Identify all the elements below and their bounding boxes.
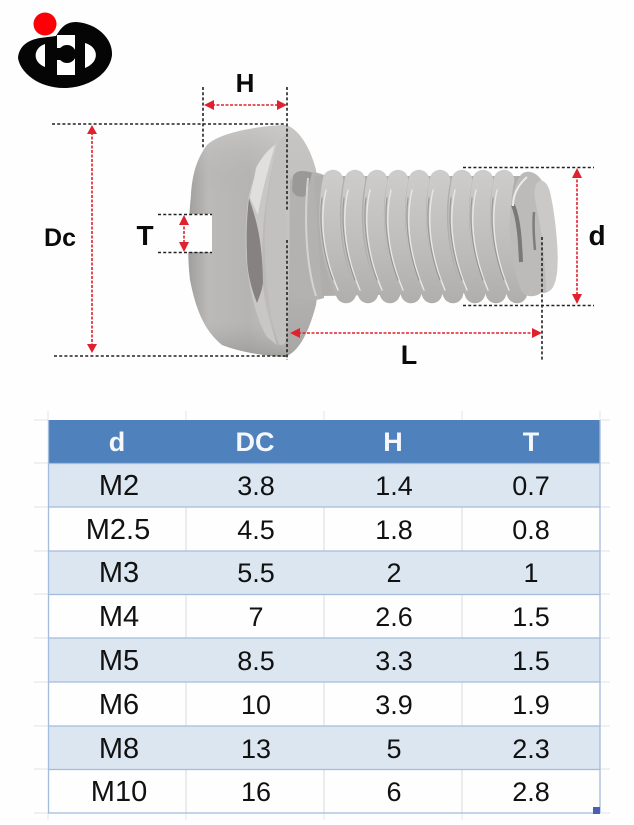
row M2.5: 1.8 xyxy=(375,515,413,545)
screw illustration xyxy=(186,125,558,357)
row M10: 16 xyxy=(241,777,271,807)
row M5: 3.3 xyxy=(375,646,413,676)
row M3: M3 xyxy=(99,557,139,589)
row M6: 1.9 xyxy=(512,690,550,720)
row M4: 1.5 xyxy=(512,602,550,632)
row M3: 2 xyxy=(386,558,402,588)
table header: d xyxy=(109,427,125,457)
slot xyxy=(186,214,212,252)
row M3: 1 xyxy=(523,558,539,588)
row M6: M6 xyxy=(99,689,139,721)
underside ring xyxy=(265,135,286,345)
thread ridges xyxy=(321,180,517,293)
row M2.5: 0.8 xyxy=(512,515,550,545)
spec table xyxy=(34,411,610,820)
label T: T xyxy=(136,220,154,251)
screw flange underside xyxy=(285,125,320,357)
row M3: 5.5 xyxy=(237,558,275,588)
row M2 xyxy=(99,470,550,502)
row borders xyxy=(48,420,600,813)
row M5: 1.5 xyxy=(512,646,550,676)
row M8: M8 xyxy=(99,733,139,765)
table rows text xyxy=(86,470,550,808)
dimension arrow H xyxy=(204,100,287,110)
table header xyxy=(48,420,600,463)
table header: T xyxy=(523,427,540,457)
dimension arrow d xyxy=(572,168,582,304)
row M3 xyxy=(99,557,539,589)
spreadsheet outer gridlines xyxy=(34,411,610,820)
head chamfer band xyxy=(246,140,278,345)
row M5: M5 xyxy=(99,645,139,677)
logo xyxy=(18,12,112,88)
label H: H xyxy=(236,68,254,98)
label Dc: Dc xyxy=(44,224,76,252)
table header: DC xyxy=(236,427,274,457)
row M2: 0.7 xyxy=(512,471,550,501)
column gridlines xyxy=(186,507,462,813)
row M6: 3.9 xyxy=(375,690,413,720)
row M10: M10 xyxy=(91,776,147,808)
screw tip xyxy=(510,172,558,296)
row M2: 3.8 xyxy=(237,471,275,501)
row M2.5 xyxy=(86,514,550,546)
row stripes xyxy=(48,463,600,769)
row M5 xyxy=(99,645,550,677)
row M2: M2 xyxy=(99,470,139,502)
row M10 xyxy=(91,776,550,808)
dimension lines xyxy=(52,87,594,360)
row M10: 2.8 xyxy=(512,777,550,807)
row M6: 10 xyxy=(241,690,271,720)
table header: H xyxy=(383,427,403,457)
row M2.5: M2.5 xyxy=(86,514,150,546)
row M8: 2.3 xyxy=(512,734,550,764)
neck xyxy=(290,172,324,300)
row M2: 1.4 xyxy=(375,471,413,501)
row M4: M4 xyxy=(99,601,139,633)
row M4: 7 xyxy=(248,602,264,632)
row M8: 5 xyxy=(386,734,402,764)
row M4 xyxy=(99,601,550,633)
screw head xyxy=(188,125,289,357)
dimension arrow L xyxy=(290,328,542,338)
row M8: 13 xyxy=(241,734,271,764)
label d: d xyxy=(588,220,606,251)
dimension arrow Dc xyxy=(87,125,97,353)
label L: L xyxy=(401,340,417,370)
fill handle xyxy=(593,807,600,814)
thread core xyxy=(314,176,538,296)
row M10: 6 xyxy=(386,777,402,807)
row M5: 8.5 xyxy=(237,646,275,676)
row M8 xyxy=(99,733,550,765)
row M4: 2.6 xyxy=(375,602,413,632)
row M2.5: 4.5 xyxy=(237,515,275,545)
row M6 xyxy=(99,689,550,721)
dimension arrow T xyxy=(179,215,189,252)
